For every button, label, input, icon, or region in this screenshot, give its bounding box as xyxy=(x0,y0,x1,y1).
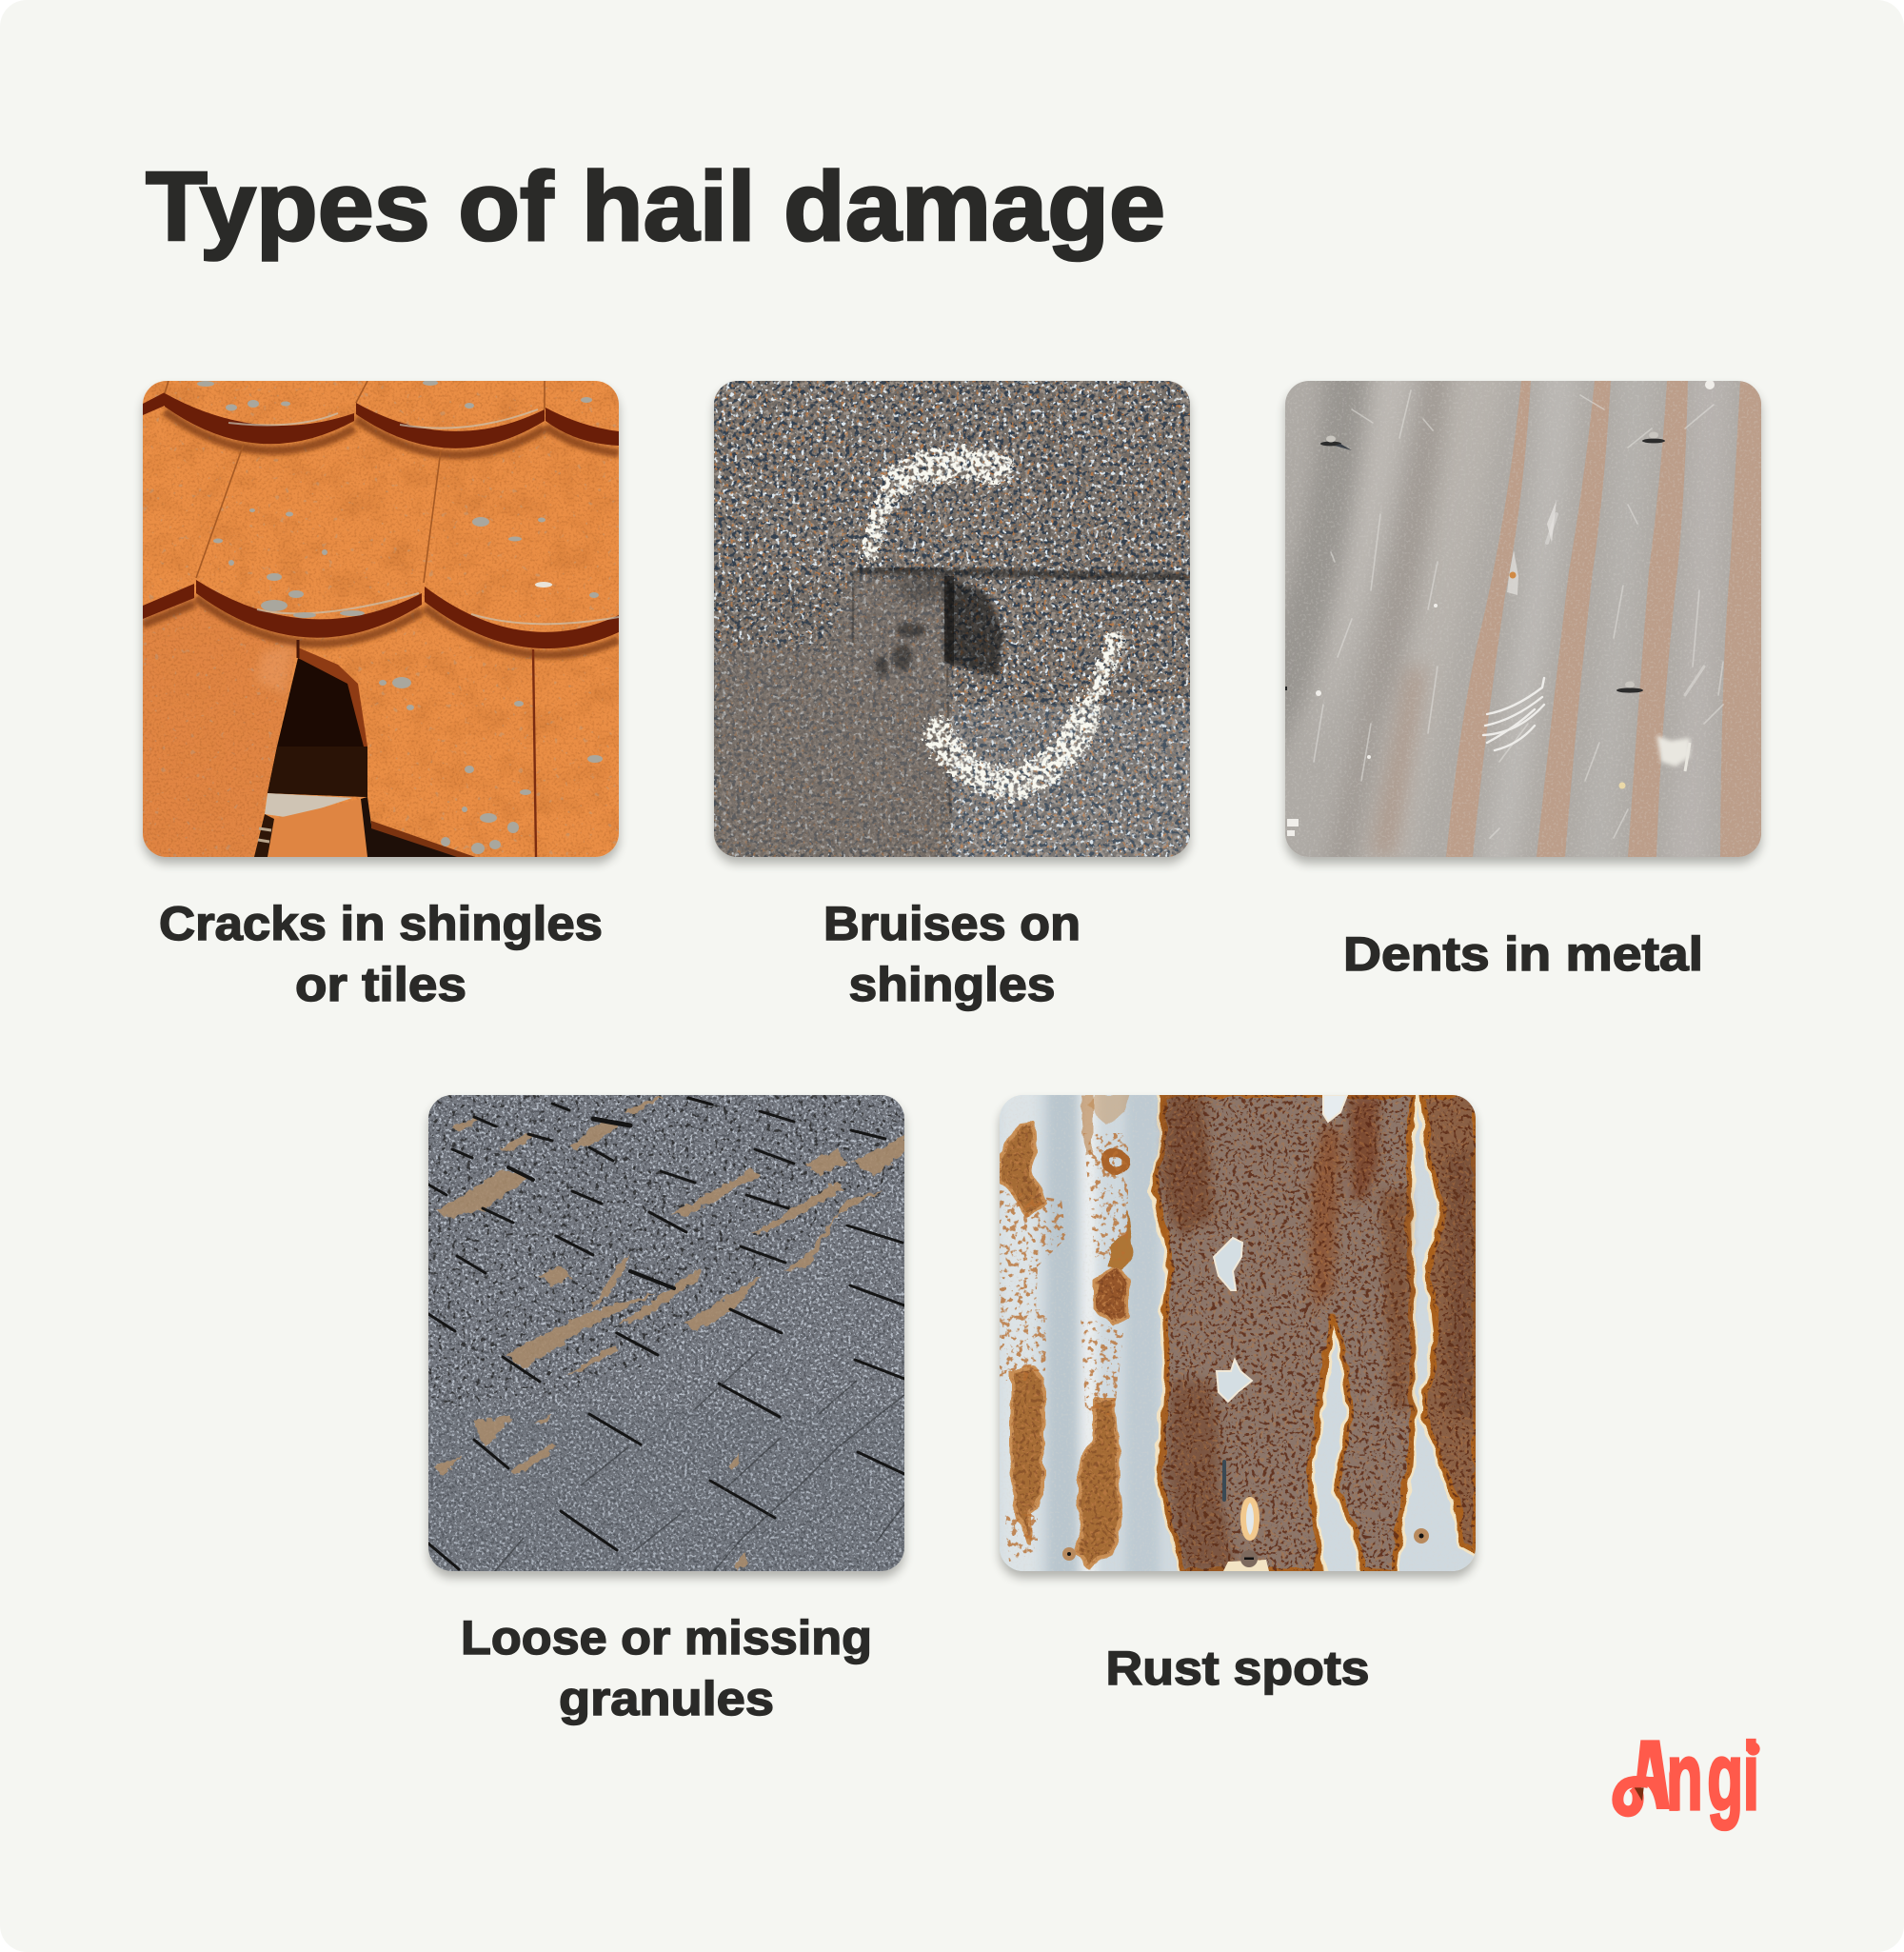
scratch cluster dent xyxy=(1483,678,1544,750)
muted lower-left shingle xyxy=(714,576,952,857)
chalk circle xyxy=(872,464,1117,784)
rust stripes xyxy=(1446,381,1761,857)
impact blotch xyxy=(1656,735,1690,767)
label: rust spots: Rust spots xyxy=(1106,1642,1369,1695)
bruise xyxy=(944,576,1004,678)
screws xyxy=(1320,436,1352,450)
logo: Angi: Angi xyxy=(1636,1723,1759,1830)
label: bruises on shingles: Bruises on xyxy=(823,897,1081,950)
label: bruises on shingles xyxy=(823,897,1081,1011)
panel: rust spots xyxy=(994,1095,1481,1695)
streak marks and screws xyxy=(1222,1462,1226,1500)
cream halo xyxy=(1154,1095,1476,1571)
label: loose or missing granules xyxy=(461,1611,872,1725)
label: dents in metal: Dents in metal xyxy=(1343,927,1703,981)
panel: bruises on shingles xyxy=(708,381,1196,1011)
hole in tile xyxy=(268,658,367,797)
title: Types of hail damage xyxy=(146,151,1165,261)
shingle slits xyxy=(428,1098,904,1569)
scattered rust specks xyxy=(1000,1133,1128,1562)
label: cracks in shingles or tiles: Cracks in shingles xyxy=(159,897,603,950)
rust bands xyxy=(1154,1095,1476,1571)
photo: shingles with missing granules xyxy=(428,1095,904,1571)
exposed mat xyxy=(433,1097,904,1571)
photo: rust streaks on galvanized metal xyxy=(1000,1095,1476,1571)
label: cracks in shingles or tiles xyxy=(159,897,603,1011)
label: loose or missing granules: Loose or missing xyxy=(461,1611,872,1664)
panel: dents in metal xyxy=(1279,381,1767,981)
exposed metal holes xyxy=(1214,1095,1347,1402)
photo: broken orange roof tiles xyxy=(143,381,619,857)
deep rust zones xyxy=(1161,1095,1476,1571)
scratches xyxy=(1314,390,1723,838)
label: bruises on shingles: shingles xyxy=(849,958,1055,1011)
panel: cracks in shingles or tiles xyxy=(137,381,625,1011)
left rust streaks xyxy=(1000,1122,1128,1566)
panel: loose or missing granules xyxy=(423,1095,910,1725)
photo: dented corrugated metal xyxy=(1285,381,1761,857)
label: cracks in shingles or tiles: or tiles xyxy=(295,958,466,1011)
label: loose or missing granules: granules xyxy=(559,1672,774,1725)
photo: bruised granular shingle with chalk circle xyxy=(714,381,1190,857)
